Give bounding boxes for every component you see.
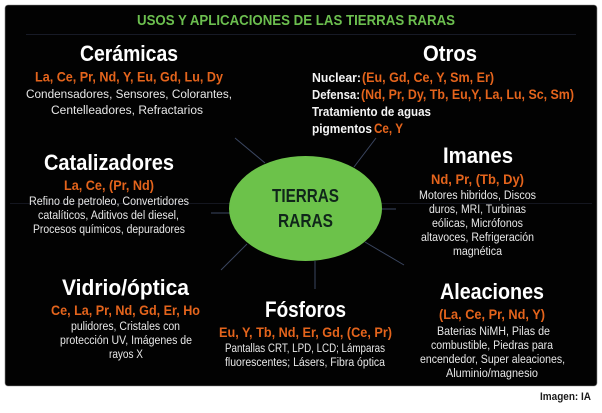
panel: otros: (Eu, Gd, Ce, Y, Sm, Er) [362,69,494,85]
panel: otros: Defensa: [312,87,360,102]
panel: aleaciones [420,279,565,380]
panel: otros: Ce, Y [374,120,404,136]
panel: aleaciones: encendedor, Super aleaciones, [420,352,565,366]
panel: otros: Nuclear: [312,70,361,85]
panel: catalizadores: Refino de petroleo, Convertidores [29,194,189,208]
panel: aleaciones: Aleaciones [440,279,544,304]
panel: cerámicas: Cerámicas [80,41,178,66]
panel: catalizadores [29,150,189,236]
panel: vidrio/óptica: Ce, La, Pr, Nd, Gd, Er, Ho [51,302,200,318]
panel: fósforos: fluorescentes; Lásers, Fibra óptica [225,355,385,369]
panel: imanes [419,143,536,258]
panel: vidrio/óptica: pulidores, Cristales con [71,319,180,333]
image credit: Imagen: IA [540,391,591,403]
panel: vidrio/óptica: protección UV, Imágenes de [60,333,192,347]
panel: imanes: Motores hibridos, Discos [419,188,536,202]
panel: vidrio/óptica [51,275,200,361]
panel: imanes: duros, MRI, Turbinas [429,202,526,216]
panel: vidrio/óptica: Vidrio/óptica [62,275,189,300]
panel: fósforos: Fósforos [265,297,346,322]
panel: vidrio/óptica: rayos X [109,347,143,361]
panel: aleaciones: Baterias NiMH, Pilas de [437,324,550,338]
panel: imanes: altavoces, Refrigeración [421,230,534,244]
central ellipse: tierras raras: RARAS [278,211,333,231]
panel: otros: pigmentos [312,121,372,136]
central ellipse: tierras raras [229,156,382,261]
panel: imanes: Nd, Pr, (Tb, Dy) [431,171,524,187]
panel: catalizadores: Procesos químicos, depuradores [33,222,185,236]
panel: cerámicas [26,41,232,117]
panel: fósforos: Eu, Y, Tb, Nd, Er, Gd, (Ce, Pr) [219,324,392,340]
panel: otros [312,41,574,136]
panel: fósforos: Pantallas CRT, LPD, LCD; Lámparas [225,341,385,355]
panel: imanes: magnética [453,244,502,258]
panel: imanes: eólicas, Micrófonos [432,216,523,230]
panel: cerámicas: Condensadores, Sensores, Colorantes, [26,87,232,101]
connector lines [211,138,404,289]
panel: catalizadores: Catalizadores [44,150,174,175]
central ellipse: tierras raras: TIERRAS [272,186,339,206]
panel: fósforos [219,297,392,369]
title: USOS Y APLICACIONES DE LAS TIERRAS RARAS [137,13,455,29]
panel: catalizadores: La, Ce, (Pr, Nd) [64,177,154,193]
panel: imanes: Imanes [443,143,513,168]
panel: catalizadores: catalíticos, Aditivos del diesel, [38,208,179,222]
panel: aleaciones: Aluminio/magnesio [446,366,538,380]
panel: otros: Otros [423,41,477,66]
panel: aleaciones: (La, Ce, Pr, Nd, Y) [439,306,545,322]
panel: cerámicas: Centelleadores, Refractarios [51,103,203,117]
panel: cerámicas: La, Ce, Pr, Nd, Y, Eu, Gd, Lu, Dy [35,68,223,84]
panel: otros: (Nd, Pr, Dy, Tb, Eu,Y, La, Lu, Sc, Sm) [361,86,574,102]
panel: otros: Tratamiento de aguas [312,104,431,119]
panel: aleaciones: combustible, Piedras para [431,338,553,352]
